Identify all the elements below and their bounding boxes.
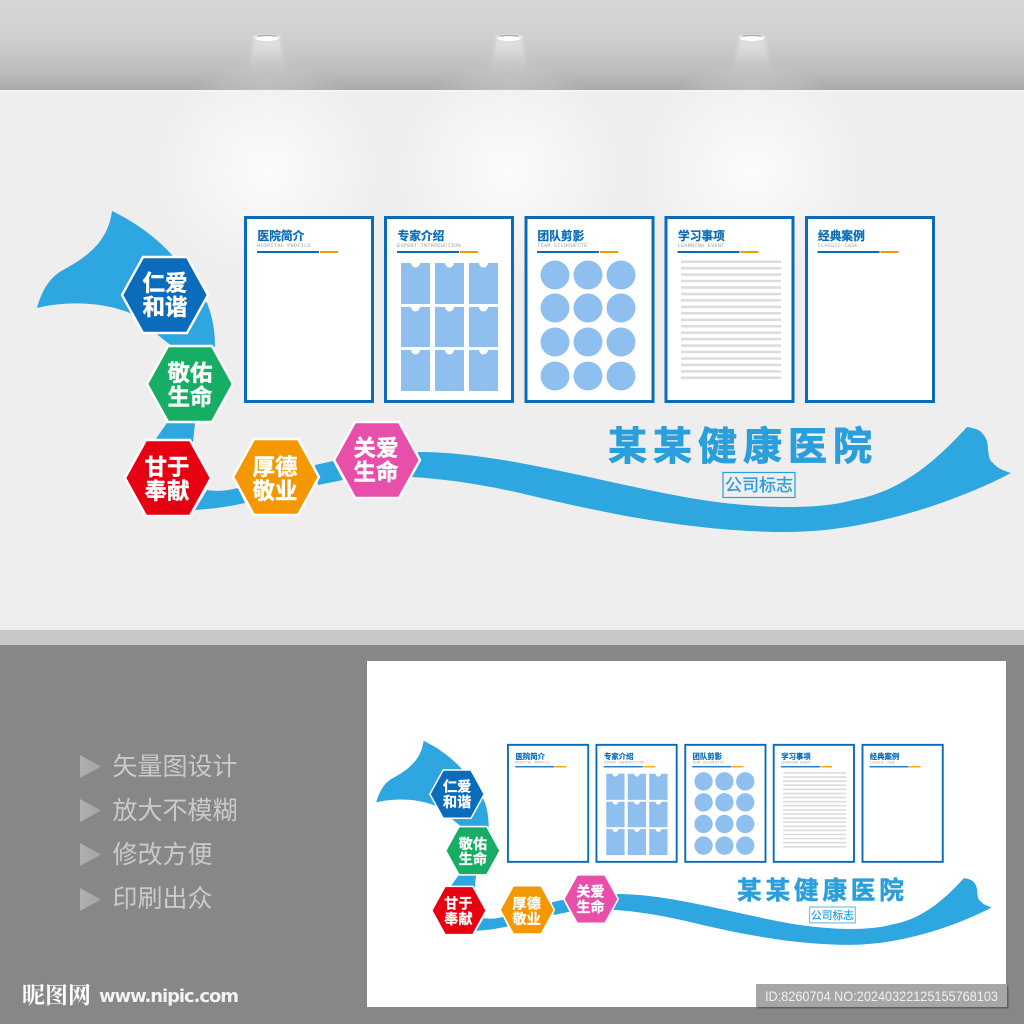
feature: 印刷出众: 印刷出众 [112,885,213,913]
panel: 专家介绍: EXPERT INTRODUCTION [397,242,461,249]
preview hexagon: 甘于奉献 [432,886,486,935]
image ID stamp: ID:8260704 NO:20240322125155768103 [765,988,998,1004]
wall background [0,90,1024,630]
preview hexagon: 敬佑生命 [446,827,500,875]
preview hospital name: 某某健康医院 [737,877,908,905]
preview hexagon: 仁爱和谐: 和谐 [443,794,471,811]
hexagon: 关爱生命 [334,422,420,498]
preview hexagon: 仁爱和谐 [430,770,484,818]
ribbon: dolphin tail [37,211,215,347]
floor band [0,630,1024,645]
panel: 团队剪影: TEAM SILHOUETTE [537,242,588,249]
preview hexagon: 敬佑生命: 生命 [459,850,487,868]
panel: 学习事项: 学习事项 [678,229,725,243]
hexagon: 甘于奉献 [125,440,211,516]
preview panel: 经典案例 [863,745,943,862]
ribbon: link orange to pink [315,461,343,485]
image ID stamp [756,984,1008,1008]
preview hexagon: 敬佑生命: 敬佑 [459,836,487,853]
feature: 矢量图设计: 矢量图设计 [112,753,238,781]
watermark logo: 昵图网 [22,983,91,1008]
panel: 专家介绍 [386,218,512,402]
panel: 团队剪影 [526,218,653,402]
panel: 专家介绍: 专家介绍 [398,229,444,243]
preview hexagon: 厚德敬业: 厚德 [512,895,541,913]
hexagon: 甘于奉献: 甘于 [144,455,190,480]
preview panel: 团队剪影 [685,745,765,862]
preview panel: 团队剪影: 团队剪影 [692,751,723,761]
preview hexagon: 甘于奉献: 奉献 [444,910,473,928]
ribbon: link red to orange [195,488,245,510]
preview hexagon: 关爱生命: 关爱 [576,883,605,901]
hexagon: 敬佑生命: 敬佑 [167,361,213,386]
hexagon: 关爱生命: 生命 [353,459,399,485]
preview artwork [376,741,992,945]
ceiling band [0,0,1024,90]
preview panel: 学习事项 [774,745,854,862]
company logo box: 公司标志 [725,476,793,495]
ceiling spotlights [248,34,771,72]
watermark logo: www.nipic.com [99,986,239,1007]
panel: 学习事项 [666,218,793,402]
hexagon: 仁爱和谐: 和谐 [142,295,188,320]
hexagon: 关爱生命: 关爱 [353,436,399,461]
hexagon: 敬佑生命 [147,346,233,422]
preview panel: 医院简介: HOSPITAL PROFILE [515,762,549,766]
preview panel: 经典案例: CLASSIC CASE [869,762,895,766]
hexagon: 厚德敬业: 厚德 [252,455,298,480]
hexagon: 仁爱和谐: 仁爱 [142,271,188,296]
wall light glow [0,60,1024,280]
hexagon: 甘于奉献: 奉献 [144,479,190,504]
watermark logo [22,983,239,1008]
feature: 放大不模糊: 放大不模糊 [112,797,238,825]
expert photo tiles [401,263,498,391]
preview panel: 专家介绍: 专家介绍 [604,751,634,761]
panel: 医院简介: HOSPITAL PROFILE [257,242,311,249]
ribbon: main wave [412,427,1011,532]
feature: 修改方便: 修改方便 [112,841,213,869]
preview panel: 学习事项: 学习事项 [781,751,811,761]
preview hexagon: 仁爱和谐: 仁爱 [443,779,471,796]
preview hexagon: 关爱生命 [564,875,618,923]
text placeholder lines [681,262,781,378]
hexagon: 仁爱和谐 [122,257,208,333]
preview hexagon: 甘于奉献: 甘于 [444,896,473,913]
panel: 经典案例: 经典案例 [818,229,865,243]
hospital name title: 某某健康医院 [608,426,878,469]
preview logo box: 公司标志 [811,909,854,922]
preview panel: 专家介绍: EXPERT INTRODUCTION [604,762,644,766]
hexagon: 厚德敬业: 敬业 [252,479,298,504]
preview hexagon: 厚德敬业 [500,886,554,934]
panel: 经典案例 [806,218,934,402]
white preview card [367,661,1006,1007]
preview panel: 团队剪影: TEAM SILHOUETTE [692,762,724,766]
preview panel: 专家介绍 [596,745,677,862]
team silhouette circles [540,260,636,390]
preview hexagon: 关爱生命: 生命 [576,898,605,916]
ribbon: link green to red [155,423,195,442]
preview ribbon [376,741,992,945]
panel: 经典案例: CLASSIC CASE [818,242,858,249]
panel: 学习事项: LEARNING EVENT [678,242,725,249]
preview panel: 医院简介 [508,745,588,862]
panel: 医院简介: 医院简介 [258,229,305,243]
feature list [80,753,238,913]
preview panel: 学习事项: LEARNING EVENT [781,762,811,766]
grey footer background [0,645,1024,1024]
preview hexagon: 厚德敬业: 敬业 [512,911,541,928]
preview panel: 经典案例: 经典案例 [870,751,899,761]
main wall artwork [37,211,1011,532]
panel: 团队剪影: 团队剪影 [538,229,585,243]
hexagon: 敬佑生命: 生命 [167,384,213,410]
preview panel: 医院简介: 医院简介 [516,751,546,761]
panel: 医院简介 [246,218,372,402]
hexagon: 厚德敬业 [233,439,319,515]
